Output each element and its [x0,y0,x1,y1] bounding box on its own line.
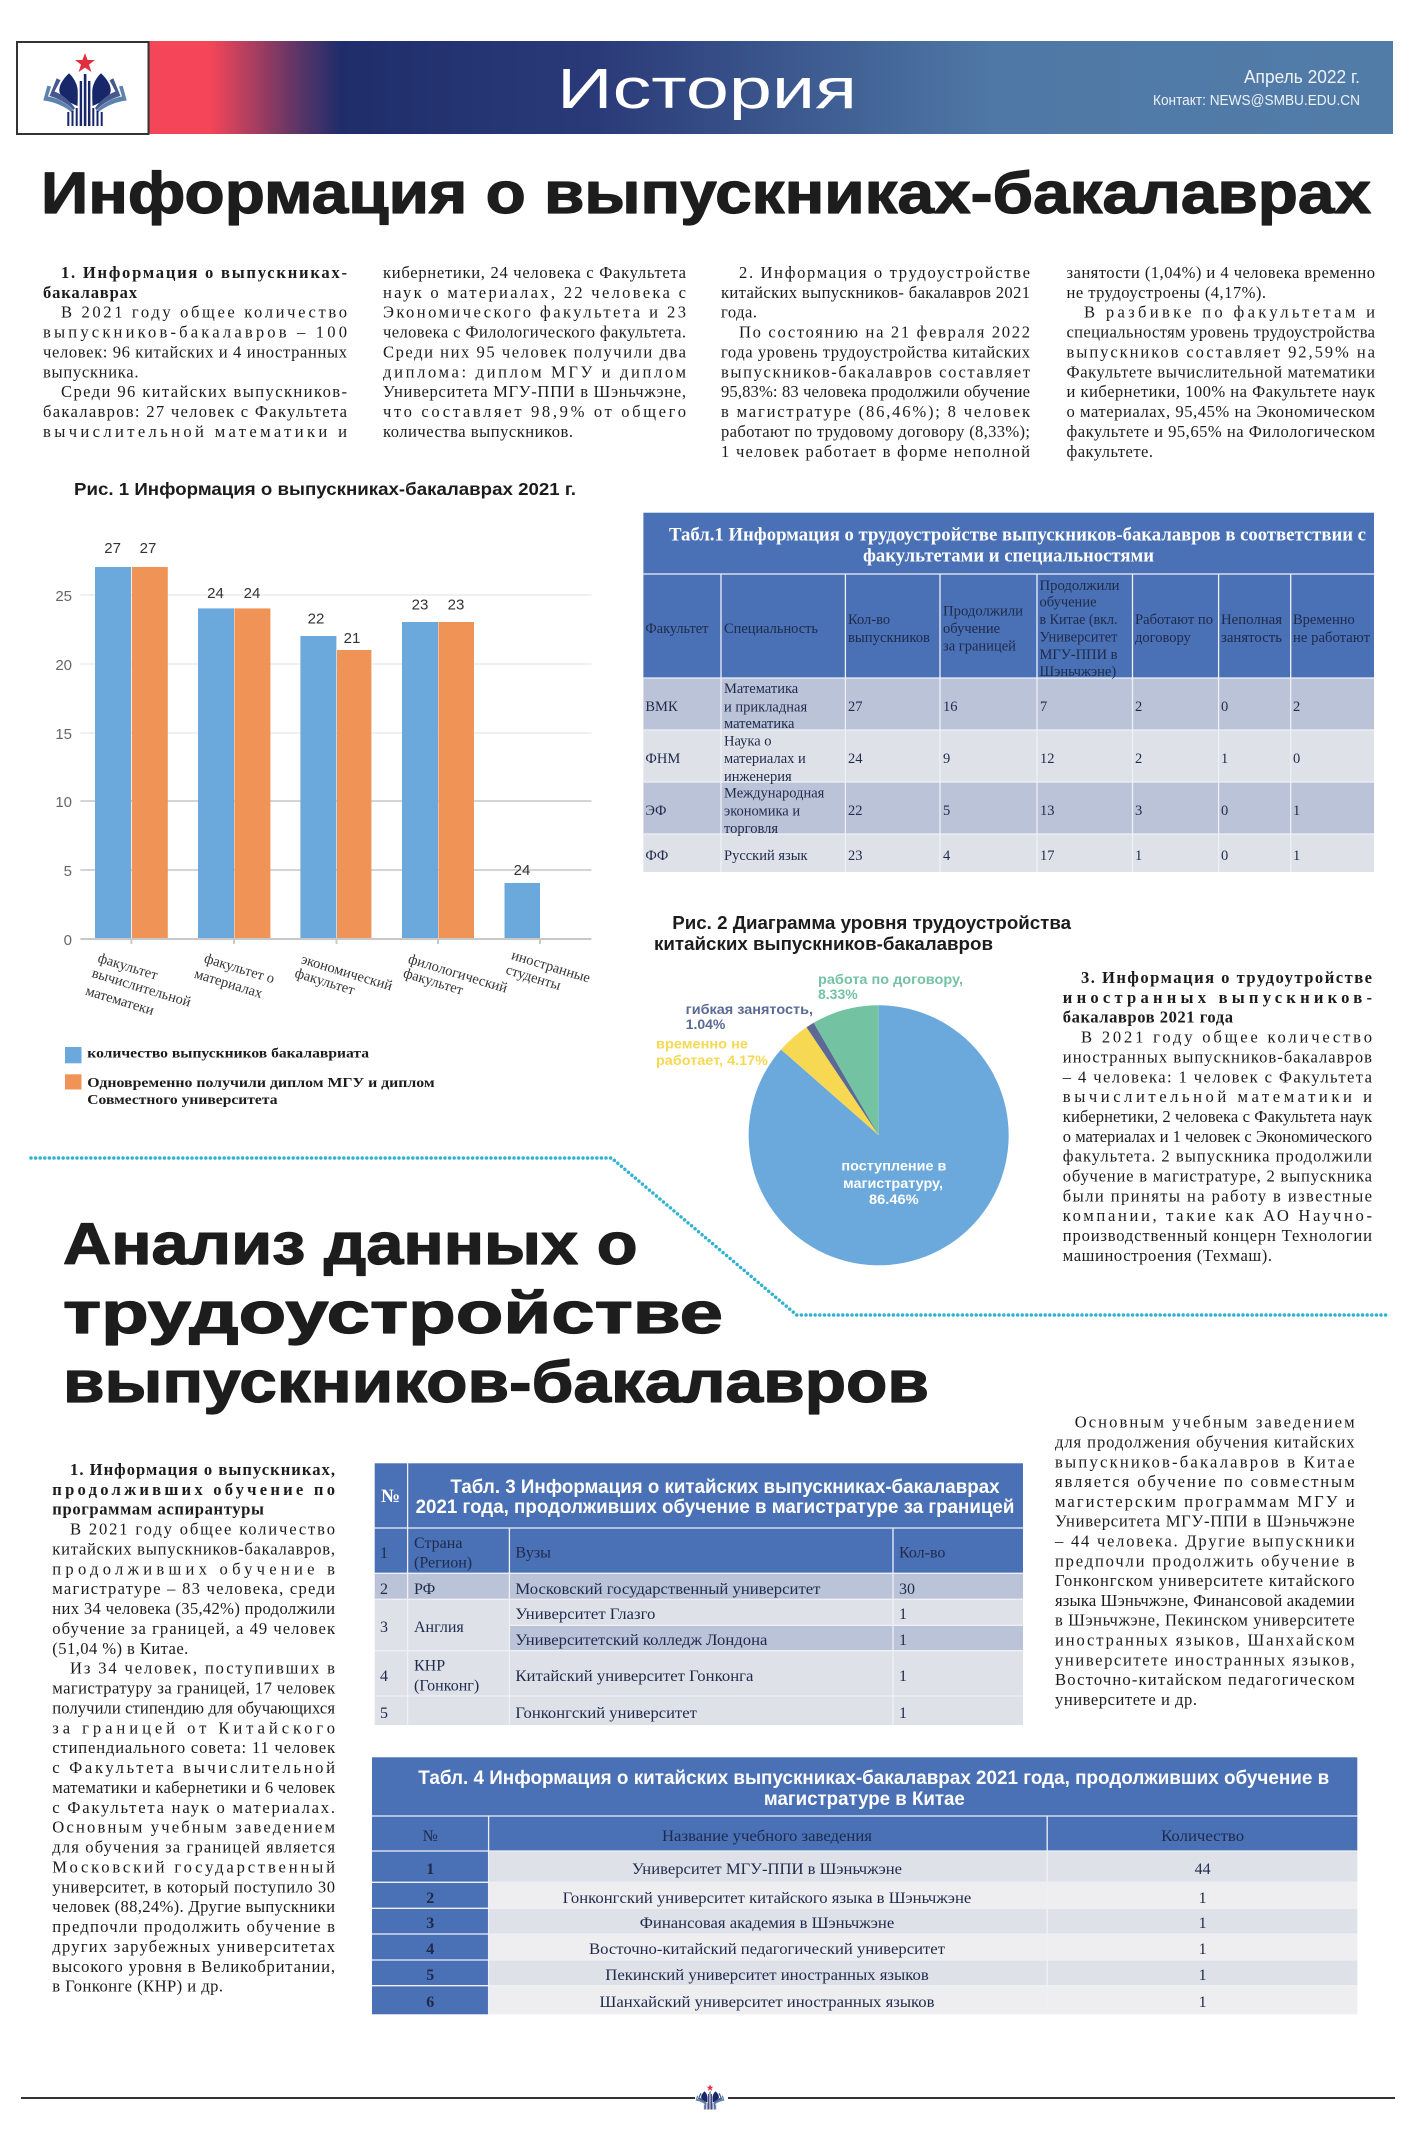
text column 1: бакалаврах [43,283,138,302]
table 1 header: Университет [1040,630,1118,646]
text: postgraduate left column: получили стипендию для обучающихся [52,1698,335,1717]
table 3 cells: Кол-во [899,1545,945,1562]
category labels: материалах [192,966,265,1002]
text column 1: 1. Информация о выпускниках- [61,263,347,282]
table 1 rows: 5 [943,803,950,819]
table 3 cells: 3 [380,1619,388,1636]
pie label: flexible [686,1001,813,1032]
text: postgraduate left column: обучение за границей, а 49 человек [52,1619,336,1638]
table 1 rows: 2 [1293,699,1300,715]
table 1 rows: Наука о [724,734,772,750]
category labels: вычислительной [90,965,193,1011]
text: foreign graduates: производственный концерн Технологии [1063,1226,1372,1245]
table 4 rows: 1 [1199,1890,1207,1907]
text column 2: диплома: диплом МГУ и диплом [383,362,686,381]
table 1 header: Факультет [645,621,709,637]
text: foreign graduates: 3. Информация о трудоутройстве [1081,968,1372,987]
table 4 title: магистратуре в Китае [764,1789,965,1810]
y axis labels: 0 [64,932,72,949]
text column 3: работают по трудовому договору (8,33%); [721,422,1030,441]
text column 1: В 2021 году общее количество [61,303,347,322]
text column 3: выпускников-бакалавров составляет [721,362,1031,381]
table 1 header: в Китае (вкл. [1040,612,1118,628]
text: main institutions right column: для продолжения обучения китайских [1055,1432,1355,1452]
value labels: 24 [207,585,224,602]
table 3 cells: Страна [414,1535,462,1552]
table 1 rows: математика [724,716,795,732]
table 4 rows: 1 [1199,1994,1207,2011]
text column 2: человека с Филологического факультета. [383,323,686,342]
text: foreign graduates: обучение в магистратуре, 2 выпускника [1063,1166,1373,1186]
contact: Контакт: NEWS@SMBU.EDU.CN [1153,92,1360,109]
table 1 rows: ФНМ [645,751,680,767]
table 1 [643,513,1374,872]
y axis labels: 15 [55,726,72,743]
text column 4: о материалах, 95,45% на Экономическом [1066,402,1375,421]
table 3 cells: Англия [414,1619,464,1636]
text: foreign graduates: о материалах и 1 человек с Экономического [1063,1127,1372,1146]
table 3 cells: 30 [899,1581,915,1598]
table 4 header [423,1828,1244,1845]
section heading [63,1212,929,1415]
table 1 header: за границей [943,639,1016,655]
table 3 cells: 1 [899,1705,907,1722]
table 1 header: договору [1135,630,1192,646]
text: main institutions right column: Основным учебным заведением [1075,1413,1355,1432]
figure 2 heading: китайских выпускников-бакалавров [654,934,993,954]
table 1 rows: экономика и [724,804,800,820]
pie label: not working: временно не [656,1036,748,1052]
icon: university logo [43,53,127,126]
header banner [148,41,1393,134]
value labels: 24 [514,862,530,879]
table 3 cells [380,1535,945,1722]
text column 2 [383,263,687,441]
table 1 rows: 17 [1040,848,1054,864]
category labels: факультет [401,965,466,999]
text: postgraduate left column: за границей от Китайского [52,1718,335,1737]
icon: footer logo [696,2084,724,2109]
table 3 cells: 1 [899,1668,907,1685]
table 3 title: Табл. 3 Информация о китайских выпускниках-бакалаврах [450,1477,1000,1498]
table 1 rows: 4 [943,848,951,864]
pie label: masters: магистратуру, [843,1175,943,1191]
pie label: not working: работает, 4.17% [656,1052,769,1068]
text column 4: факультете и 95,65% на Филологическом [1066,422,1375,441]
text column 1: бакалавров: 27 человек с Факультета [43,402,348,421]
text: main institutions right column: является обучение по совместным [1055,1472,1355,1491]
table 4 rows: 1 [1199,1915,1207,1932]
table 1 rows: 7 [1040,699,1047,715]
table 1 header: Кол-во [848,612,890,628]
figure 2 heading [654,913,1072,954]
text: postgraduate left column: Из 34 человек, поступивших в [70,1659,335,1678]
table 3 cells: 5 [380,1705,388,1722]
value labels: 22 [308,610,324,628]
table 1 rows: 0 [1221,848,1228,864]
table 4 rows: Финансовая академия в Шэньчжэне [640,1915,894,1932]
text column 2: кибернетики, 24 человека с Факультета [383,263,687,282]
text: foreign graduates: машиностроения (Техмаш). [1063,1246,1272,1265]
table 1 rows: 23 [848,848,862,864]
value labels [104,540,530,879]
text: postgraduate left column: университет, в который поступило 30 [52,1877,335,1896]
table 1 title [669,524,1366,566]
table 1 header: Неполная [1221,612,1282,628]
table 4 rows: 6 [426,1994,434,2011]
text: main institutions right column: в Шэньчжэне, Пекинском университете [1055,1611,1355,1630]
table 1 rows: 12 [1040,751,1054,767]
text column 1: выпускников-бакалавров – 100 [43,323,347,342]
text: foreign graduates: – 4 человека: 1 человек с Факультета [1062,1067,1373,1086]
table 3 cells: (Регион) [414,1555,472,1572]
text: postgraduate left column: продолживших обучение по [52,1480,335,1499]
chart legend: количество выпускников бакалавриата [87,1046,369,1060]
text: postgraduate left column [52,1460,336,1996]
table 4 rows: 1 [1199,1967,1207,1984]
text column 2: Среди них 95 человек получили два [383,342,687,362]
table 3 cells: 2 [380,1581,388,1598]
text: postgraduate left column: них 34 человека (35,42%) продолжили [52,1599,335,1618]
table 4 title: Табл. 4 Информация о китайских выпускниках-бакалаврах 2021 года, продолживших обучение в [418,1768,1329,1789]
text: main institutions right column: выпускников-бакалавров в Китае [1055,1452,1355,1471]
pie label: not working [656,1036,769,1068]
figure 1 heading: Рис. 1 Информация о выпускниках-бакалаврах 2021 г. [74,479,576,499]
text: main institutions right column: иностранных языков, Шанхайском [1055,1630,1355,1650]
table 4 rows: 4 [426,1941,434,1958]
text: postgraduate left column: для обучения за границей является [52,1838,335,1856]
table 1 header: обучение [943,621,1000,637]
text column 1: Среди 96 китайских выпускников- [61,382,347,401]
table 4 header: Название учебного заведения [662,1828,873,1845]
table 4 rows: Шанхайский университет иностранных языков [600,1994,935,2011]
text: postgraduate left column: с Факультета вычислительной [52,1758,335,1777]
text: postgraduate left column: (51,04 %) в Китае. [52,1639,188,1658]
table 1 rows: Русский язык [724,848,809,864]
pie label: masters [841,1158,947,1207]
text: postgraduate left column: магистратуре – 83 человека, среди [52,1579,335,1598]
table 3 cells: Вузы [515,1545,551,1562]
table 1 rows: и прикладная [724,700,807,716]
table 4 rows: Университет МГУ-ППИ в Шэньчжэне [632,1861,902,1878]
value labels: 27 [104,540,121,557]
text column 3: 1 человек работает в форме неполной [721,442,1030,461]
table 1 rows: 2 [1135,751,1142,767]
text column 3: По состоянию на 21 февраля 2022 [739,323,1030,342]
table 1 rows: 13 [1040,803,1054,819]
text column 4 [1066,263,1376,461]
bar chart [55,540,592,1019]
text column 4: факультете. [1066,442,1153,461]
table 1 rows: ЭФ [645,803,667,819]
text: postgraduate left column: 1. Информация о выпускниках, [70,1460,335,1479]
table 4 rows: Восточно-китайский педагогический университет [589,1941,945,1958]
category labels: филологический [406,951,509,997]
table 1 rows: 27 [848,699,862,715]
table 3 title [381,1477,1014,1518]
text column 3 [721,263,1031,461]
text: postgraduate left column: Московский государственный [52,1857,335,1876]
text: main institutions right column: Гонконгском университете китайского [1055,1571,1355,1590]
date: Апрель 2022 г. [1244,67,1360,87]
text column 4: и кибернетики, 100% на Факультете наук [1066,382,1376,401]
table 1 header: Шэньчжэне) [1040,664,1116,680]
text column 4: В разбивке по факультетам и [1084,303,1375,322]
text: postgraduate left column: китайских выпускников-бакалавров, [52,1540,335,1558]
table 1 rows: 3 [1135,803,1142,819]
text: postgraduate left column: предпочли продолжить обучение в [52,1917,335,1936]
table 1 rows: 24 [848,751,863,767]
table 3 [375,1463,1023,1725]
y axis labels: 20 [55,657,72,674]
table 3 cells: Китайский университет Гонконга [515,1668,753,1685]
y axis labels: 5 [64,863,72,880]
category labels: иностранные [509,947,592,987]
text: main institutions right column: университете и др. [1055,1690,1197,1709]
value labels: 21 [344,630,360,647]
text: main institutions right column: магистерским программам МГУ и [1055,1492,1355,1511]
text column 1: выпускника. [43,362,138,381]
table 3 cells: 1 [380,1545,388,1562]
text column 3: в магистратуре (86,46%); 8 человек [721,402,1031,421]
text column 3: 2. Информация о трудоустройстве [739,263,1030,282]
table 3 cells: 1 [899,1606,907,1623]
pie chart [656,971,1009,1265]
text column 4: не трудоустроены (4,17%). [1066,283,1266,302]
table 1 rows: 2 [1135,699,1142,715]
text column 1: вычислительной математики и [43,422,347,441]
table 1 header: не работают [1293,630,1371,646]
pie label: flexible: гибкая занятость, [686,1001,813,1017]
table 1 rows: Математика [724,681,799,697]
text column 3: 95,83%: 83 человека продолжили обучение [721,382,1030,401]
value labels: 23 [412,596,428,614]
text: main institutions right column: предпочли продолжить обучение в [1055,1551,1355,1570]
table 1 rows: ВМК [645,699,678,715]
text: postgraduate left column: в Гонконге (КНР) и др. [52,1977,223,1996]
text: foreign graduates: бакалавров 2021 года [1063,1008,1234,1027]
table 3 cells: (Гонконг) [414,1678,479,1695]
table 4 rows: 5 [426,1967,434,1984]
text column 1 [43,263,348,441]
text column 4: специальностям уровень трудоустройства [1066,323,1376,342]
table 1 header [645,578,1371,680]
text: main institutions right column: – 44 человека. Другие выпускники [1054,1532,1355,1550]
text: foreign graduates: были приняты на работу в известные [1063,1186,1372,1205]
table 1 rows: 0 [1293,751,1300,767]
table 1 title: факультетами и специальностями [863,546,1154,566]
table 4 rows: 3 [426,1915,434,1932]
table 1 rows: 0 [1221,699,1228,715]
table 1 rows: 1 [1293,803,1300,819]
text: postgraduate left column: других зарубежных университетах [52,1937,336,1956]
blue bars [95,567,540,939]
table 1 rows: 16 [943,699,958,715]
table 1 header: Временно [1293,612,1355,628]
text: postgraduate left column: высокого уровня в Великобритании, [52,1957,335,1976]
table 1 header: Работают по [1135,612,1213,628]
text column 3: китайских выпускников- бакалавров 2021 [721,283,1030,302]
text: main institutions right column: Восточно-китайском педагогическом [1055,1670,1355,1689]
table 3 title: 2021 года, продолживших обучение в магистратуре за границей [416,1497,1014,1518]
value labels: 23 [448,596,464,614]
category labels: факультет [96,950,160,984]
category labels: факультет о [202,951,276,987]
chart legend: Одновременно получили диплом МГУ и диплом [87,1075,435,1090]
text: foreign graduates: иностранных выпускников-бакалавров [1063,1047,1372,1066]
text column 2: Экономического факультета и 23 [383,303,686,322]
table 1 header: Специальность [724,621,818,637]
section heading: трудоустройстве [63,1281,723,1346]
text: main institutions right column [1054,1413,1355,1709]
table 1 header: выпускников [848,630,930,646]
text: main institutions right column: языка Шэньчжэне, Финансовой академии [1055,1591,1355,1610]
category labels: экономический [299,951,394,994]
table 1 rows: торговля [724,821,778,837]
table 3 cells: КНР [414,1658,445,1675]
logo box [17,42,148,134]
table 4 rows: Гонконгский университет китайского языка в Шэньчжэне [563,1890,971,1907]
table 3 cells: Гонконгский университет [515,1705,697,1722]
category labels: математеки [84,983,156,1019]
text column 2: наук о материалах, 22 человека с [383,283,686,302]
text: postgraduate left column: продолживших обучение в [52,1559,335,1578]
table 1 rows [645,681,1300,864]
table 1 rows: 1 [1293,848,1300,864]
text column 3: года. [721,303,757,322]
table 4 [372,1757,1357,2014]
table 1 rows: 1 [1135,848,1142,864]
text: postgraduate left column: Основным учебным заведением [52,1818,335,1837]
table 4 header: Количество [1161,1828,1244,1845]
figure 2 heading: Рис. 2 Диаграмма уровня трудоустройства [672,913,1072,933]
table 1 rows: 9 [943,751,950,767]
text: foreign graduates: вычислительной математики и [1063,1087,1372,1106]
text: postgraduate left column: магистратуру за границей, 17 человек [52,1679,336,1698]
text: foreign graduates: иностранных выпускников- [1063,988,1372,1007]
text: foreign graduates: факультета. 2 выпускника продолжили [1063,1147,1372,1166]
table 1 title: Табл.1 Информация о трудоустройстве выпускников-бакалавров в соответствии с [669,524,1366,546]
table 4 header: № [423,1828,438,1845]
value labels: 24 [244,585,260,602]
table 4 rows [426,1861,1211,2011]
text column 4: занятости (1,04%) и 4 человека временно [1066,263,1375,282]
text column 2: количества выпускников. [383,422,573,441]
table 1 rows: 0 [1221,803,1228,819]
category labels: факультет [293,965,357,999]
text column 4: выпускников составляет 92,59% на [1066,342,1376,362]
table 1 rows: 1 [1221,751,1228,767]
pie label: flexible: 1.04% [686,1016,726,1032]
category labels: студенты [504,962,563,994]
text: postgraduate left column: с Факультета наук о материалах. [52,1798,335,1817]
chart legend [65,1046,435,1107]
text: foreign graduates: кибернетики, 2 человека с Факультета наук [1063,1107,1373,1126]
value labels: 27 [140,540,156,557]
table 3 cells: Университет Глазго [515,1606,655,1623]
y axis labels: 25 [55,588,72,605]
text: foreign graduates: В 2021 году общее количество [1081,1028,1372,1047]
orange bars [132,567,474,939]
table 3 cells: 4 [380,1668,388,1685]
chart legend: Совместного университета [87,1092,278,1107]
table 3 title: № [381,1486,400,1507]
table 1 rows: инженерия [724,769,792,785]
table 4 rows: 44 [1195,1861,1211,1878]
table 1 header: занятость [1221,630,1282,646]
table 3 cells: 1 [899,1632,907,1649]
pie label: contract: работа по договору, [818,971,963,987]
section heading: Анализ данных о [63,1212,638,1277]
title: Информация о выпускниках-бакалаврах [41,161,1371,226]
table 4 rows: 1 [426,1861,434,1878]
table 1 header: обучение [1040,595,1097,611]
text column 2: что составляет 98,9% от общего [383,402,686,421]
table 1 header: МГУ-ППИ в [1040,647,1118,663]
table 1 rows: 22 [848,803,862,819]
pie label: masters: 86.46% [869,1191,919,1207]
text column 2: Университета МГУ-ППИ в Шэньчжэне, [383,382,686,401]
y axis labels [55,588,72,949]
table 4 rows: Пекинский университет иностранных языков [605,1967,929,1984]
table 1 header: Продолжили [943,604,1023,620]
section heading: выпускников-бакалавров [63,1350,929,1415]
table 3 cells: Университетский колледж Лондона [515,1632,767,1649]
pie label: contract: 8.33% [818,986,858,1002]
y axis labels: 10 [55,794,72,811]
table 1 header: Продолжили [1040,578,1120,594]
text column 4: Факультете вычислительной математики [1066,362,1375,381]
table 1 rows: ФФ [645,848,668,864]
pie label: masters: поступление в [841,1158,947,1174]
text: foreign graduates [1062,968,1373,1265]
table 4 title [418,1768,1329,1810]
text: main institutions right column: Университета МГУ-ППИ в Шэньчжэне [1055,1512,1355,1531]
text: main institutions right column: университете иностранных языков, [1055,1650,1355,1669]
table 3 cells: Московский государственный университет [515,1581,820,1598]
text: postgraduate left column: программам аспирантуры [52,1500,264,1519]
text column 1: человек: 96 китайских и 4 иностранных [43,342,348,362]
table 4 rows: 1 [1199,1941,1207,1958]
table 1 rows: Международная [724,786,825,802]
text: postgraduate left column: В 2021 году общее количество [70,1520,335,1539]
text: postgraduate left column: человек (88,24%). Другие выпускники [52,1897,335,1916]
category labels [84,947,592,1019]
pie label: contract [818,971,963,1002]
table 1 rows: материалах и [724,751,806,767]
text: postgraduate left column: стипендиального совета: 11 человек [52,1738,336,1757]
table 3 cells: РФ [414,1581,435,1598]
section name: История [557,57,857,121]
table 4 rows: 2 [426,1890,434,1907]
text: foreign graduates: компании, такие как АО Научно- [1063,1206,1372,1225]
text: postgraduate left column: математики и кабернетики и 6 человек [52,1778,336,1797]
text column 3: года уровень трудоустройства китайских [721,342,1031,362]
